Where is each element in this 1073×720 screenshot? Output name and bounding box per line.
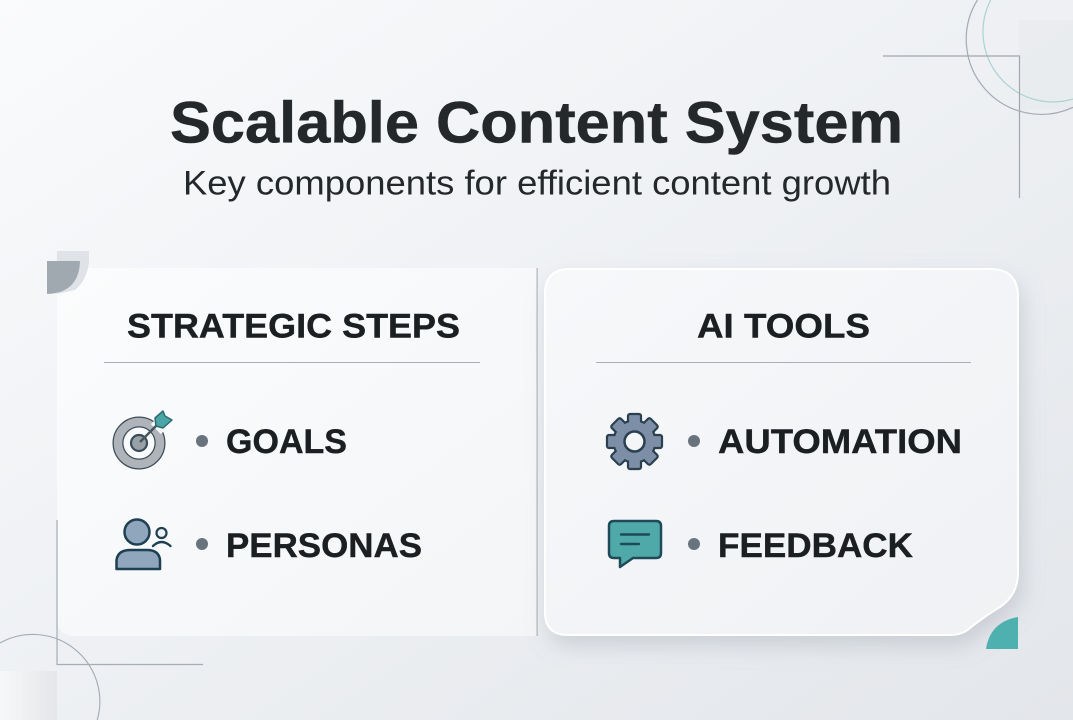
decoration: bottom-left soft patch [0,671,57,720]
heading rule [596,362,971,363]
panel: ai tools [545,269,1018,635]
heading: strategic steps: STRATEGIC STEPS [127,308,460,346]
divider between panels [536,268,538,636]
heading rule [104,362,480,363]
icon: target with arrow [113,411,172,467]
label: automation: AUTOMATION [718,423,962,461]
label: goals: GOALS [226,423,347,461]
bullet: goals [196,435,208,447]
bullet: personas [196,538,208,550]
title: Scalable Content System [170,90,903,156]
subtitle: Key components for efficient content growth [183,164,891,202]
decoration: top-right soft patch [1019,20,1073,110]
decoration: top-right circles and corner lines [883,0,1073,198]
heading: ai tools: AI TOOLS [697,308,870,346]
icon: gear [607,414,662,469]
label: personas: PERSONAS [226,527,422,565]
icon: feedback speech bubble [609,521,661,567]
decoration: top-left corner tab [47,251,89,294]
bullet: feedback [688,538,700,550]
panel: strategic steps [57,268,537,636]
decoration: bottom-left circle and corner lines [0,520,203,720]
bullet: automation [688,435,700,447]
decoration: bottom-right teal corner [986,617,1018,649]
label: feedback: FEEDBACK [718,527,913,565]
icon: personas [116,520,170,569]
